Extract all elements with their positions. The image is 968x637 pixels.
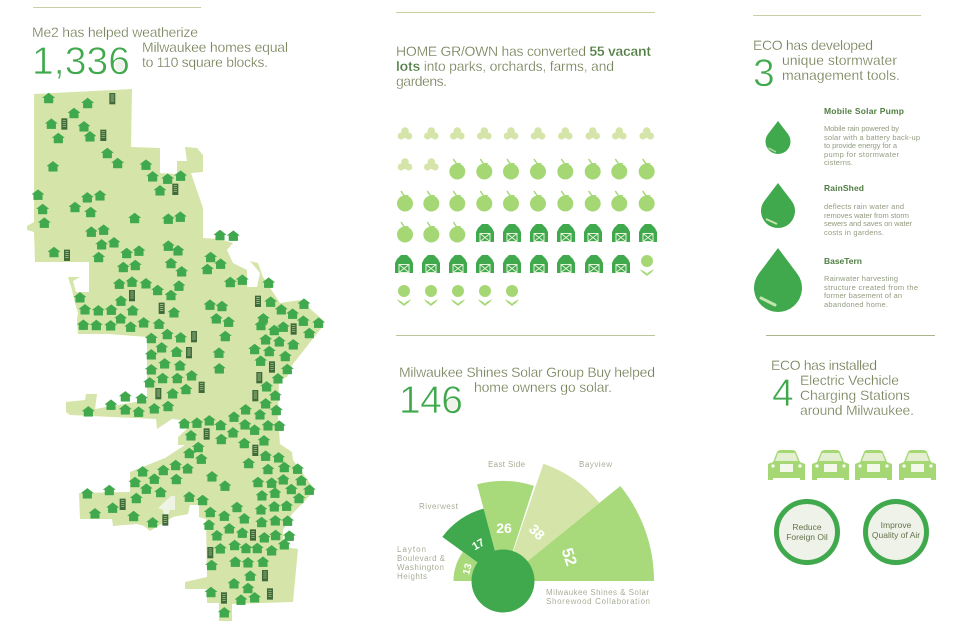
chart: solar installs by neighborhood: Riverwest (419, 502, 459, 511)
heading: charging intro: ECO has installed (771, 357, 877, 373)
text: Mobile Solar Pump: Mobile Solar Pump (824, 106, 904, 116)
text: RainShed: removes water from storm (824, 211, 909, 220)
chart: solar installs by neighborhood: 17 (470, 537, 487, 553)
icons: electric cars (768, 450, 936, 480)
chart: solar installs by neighborhood: Layton (397, 545, 426, 554)
text: unique tools: management tools. (782, 67, 900, 83)
text: homes equal: to 110 square blocks. (142, 54, 268, 70)
chart: solar installs by neighborhood: East Side (488, 460, 526, 469)
chart: solar installs by neighborhood: Milwaukee Shines & Solar (546, 588, 649, 597)
icon: medium water drop (761, 183, 795, 228)
text: RainShed (824, 183, 912, 237)
icon: large water drop (754, 248, 802, 312)
chart: solar installs by neighborhood: Shorewood Collaboration (546, 597, 650, 606)
text: BaseTern: BaseTern (824, 256, 862, 266)
text: BaseTern (824, 256, 918, 309)
text: home owners: home owners go solar. (474, 379, 612, 395)
badge: improve quality of air: Quality of Air (872, 530, 920, 540)
map: Milwaukee (27, 89, 325, 621)
text: BaseTern: abandoned home. (824, 300, 888, 309)
badge: improve quality of air (866, 502, 926, 562)
badge: improve quality of air: Improve (881, 520, 912, 530)
number: 1,336: 1,336 (32, 40, 130, 83)
text: homes equal: Milwaukee homes equal (142, 39, 288, 55)
badge: reduce foreign oil: Foreign Oil (786, 532, 828, 542)
text: RainShed: deflects rain water and (824, 202, 904, 211)
text: charging stations: Charging Stations (800, 387, 910, 403)
text: Mobile Solar Pump: to provide energy for a (824, 141, 898, 150)
panel: weatherized homes (27, 7, 325, 621)
chart: solar installs by neighborhood: 26 (496, 520, 512, 536)
text: RainShed: costs in gardens. (824, 228, 884, 237)
badge: reduce foreign oil: Reduce (792, 522, 822, 532)
text: BaseTern: former basement of an (824, 291, 902, 300)
text: unique tools: unique stormwater (782, 52, 897, 68)
chart: solar installs by neighborhood: Heights (397, 572, 427, 581)
text: vacant lots intro: gardens. (396, 73, 447, 89)
chart: solar installs by neighborhood: Bayview (579, 460, 612, 469)
text: Mobile Solar Pump: cisterns. (824, 158, 853, 167)
text: Mobile Solar Pump: solar with a battery back-up (824, 133, 920, 142)
panel: solar group buy (396, 335, 655, 612)
icons: houses and apartment buildings, south (77, 313, 325, 617)
text: Mobile Solar Pump: Mobile rain powered by (824, 124, 899, 133)
heading: stormwater intro: ECO has developed (753, 37, 873, 53)
chart: solar installs by neighborhood: 38 (526, 521, 548, 543)
text: Mobile Solar Pump (824, 106, 920, 167)
text: vacant lots intro (396, 43, 651, 89)
panel: charging stations (766, 335, 936, 562)
panel: stormwater tools (753, 15, 921, 312)
heading: solar intro: Milwaukee Shines Solar Group Buy helped (399, 364, 655, 380)
badge: reduce foreign oil (776, 502, 838, 562)
number: 3: 3 (753, 52, 775, 95)
text: BaseTern: Rainwater harvesting (824, 274, 898, 283)
chart: solar installs by neighborhood: Washington (397, 563, 444, 572)
icon: small water drop (765, 121, 790, 154)
text: homes equal (142, 39, 288, 70)
text: vacant lots intro: HOME GR/OWN has converted 55 vacant (396, 43, 651, 59)
text: RainShed: RainShed (824, 183, 864, 193)
pictogram: parks, orchards, farms, gardens (395, 127, 657, 306)
text: RainShed: sewers and saves on water (824, 219, 912, 228)
text: unique tools (782, 52, 900, 83)
heading: weatherize intro: Me2 has helped weatherize (32, 24, 198, 40)
chart: solar installs by neighborhood: 52 (558, 546, 579, 568)
number: 146: 146 (399, 379, 463, 422)
chart: solar installs by neighborhood (397, 460, 654, 612)
text: charging stations: Electric Vechicle (800, 372, 899, 388)
panel: vacant lots (395, 12, 657, 306)
chart: solar installs by neighborhood: Boulevard & (397, 554, 446, 563)
text: BaseTern: structure created from the (824, 283, 918, 292)
text: vacant lots intro: lots into parks, orchards, farms, and (396, 58, 614, 74)
number: 4: 4 (772, 372, 794, 415)
icons: houses and apartment buildings, north (32, 93, 310, 319)
text: charging stations (800, 372, 914, 418)
text: Mobile Solar Pump: pump for stormwater (824, 150, 900, 159)
chart: solar installs by neighborhood: 13 (461, 562, 475, 576)
text: charging stations: around Milwaukee. (800, 402, 914, 418)
